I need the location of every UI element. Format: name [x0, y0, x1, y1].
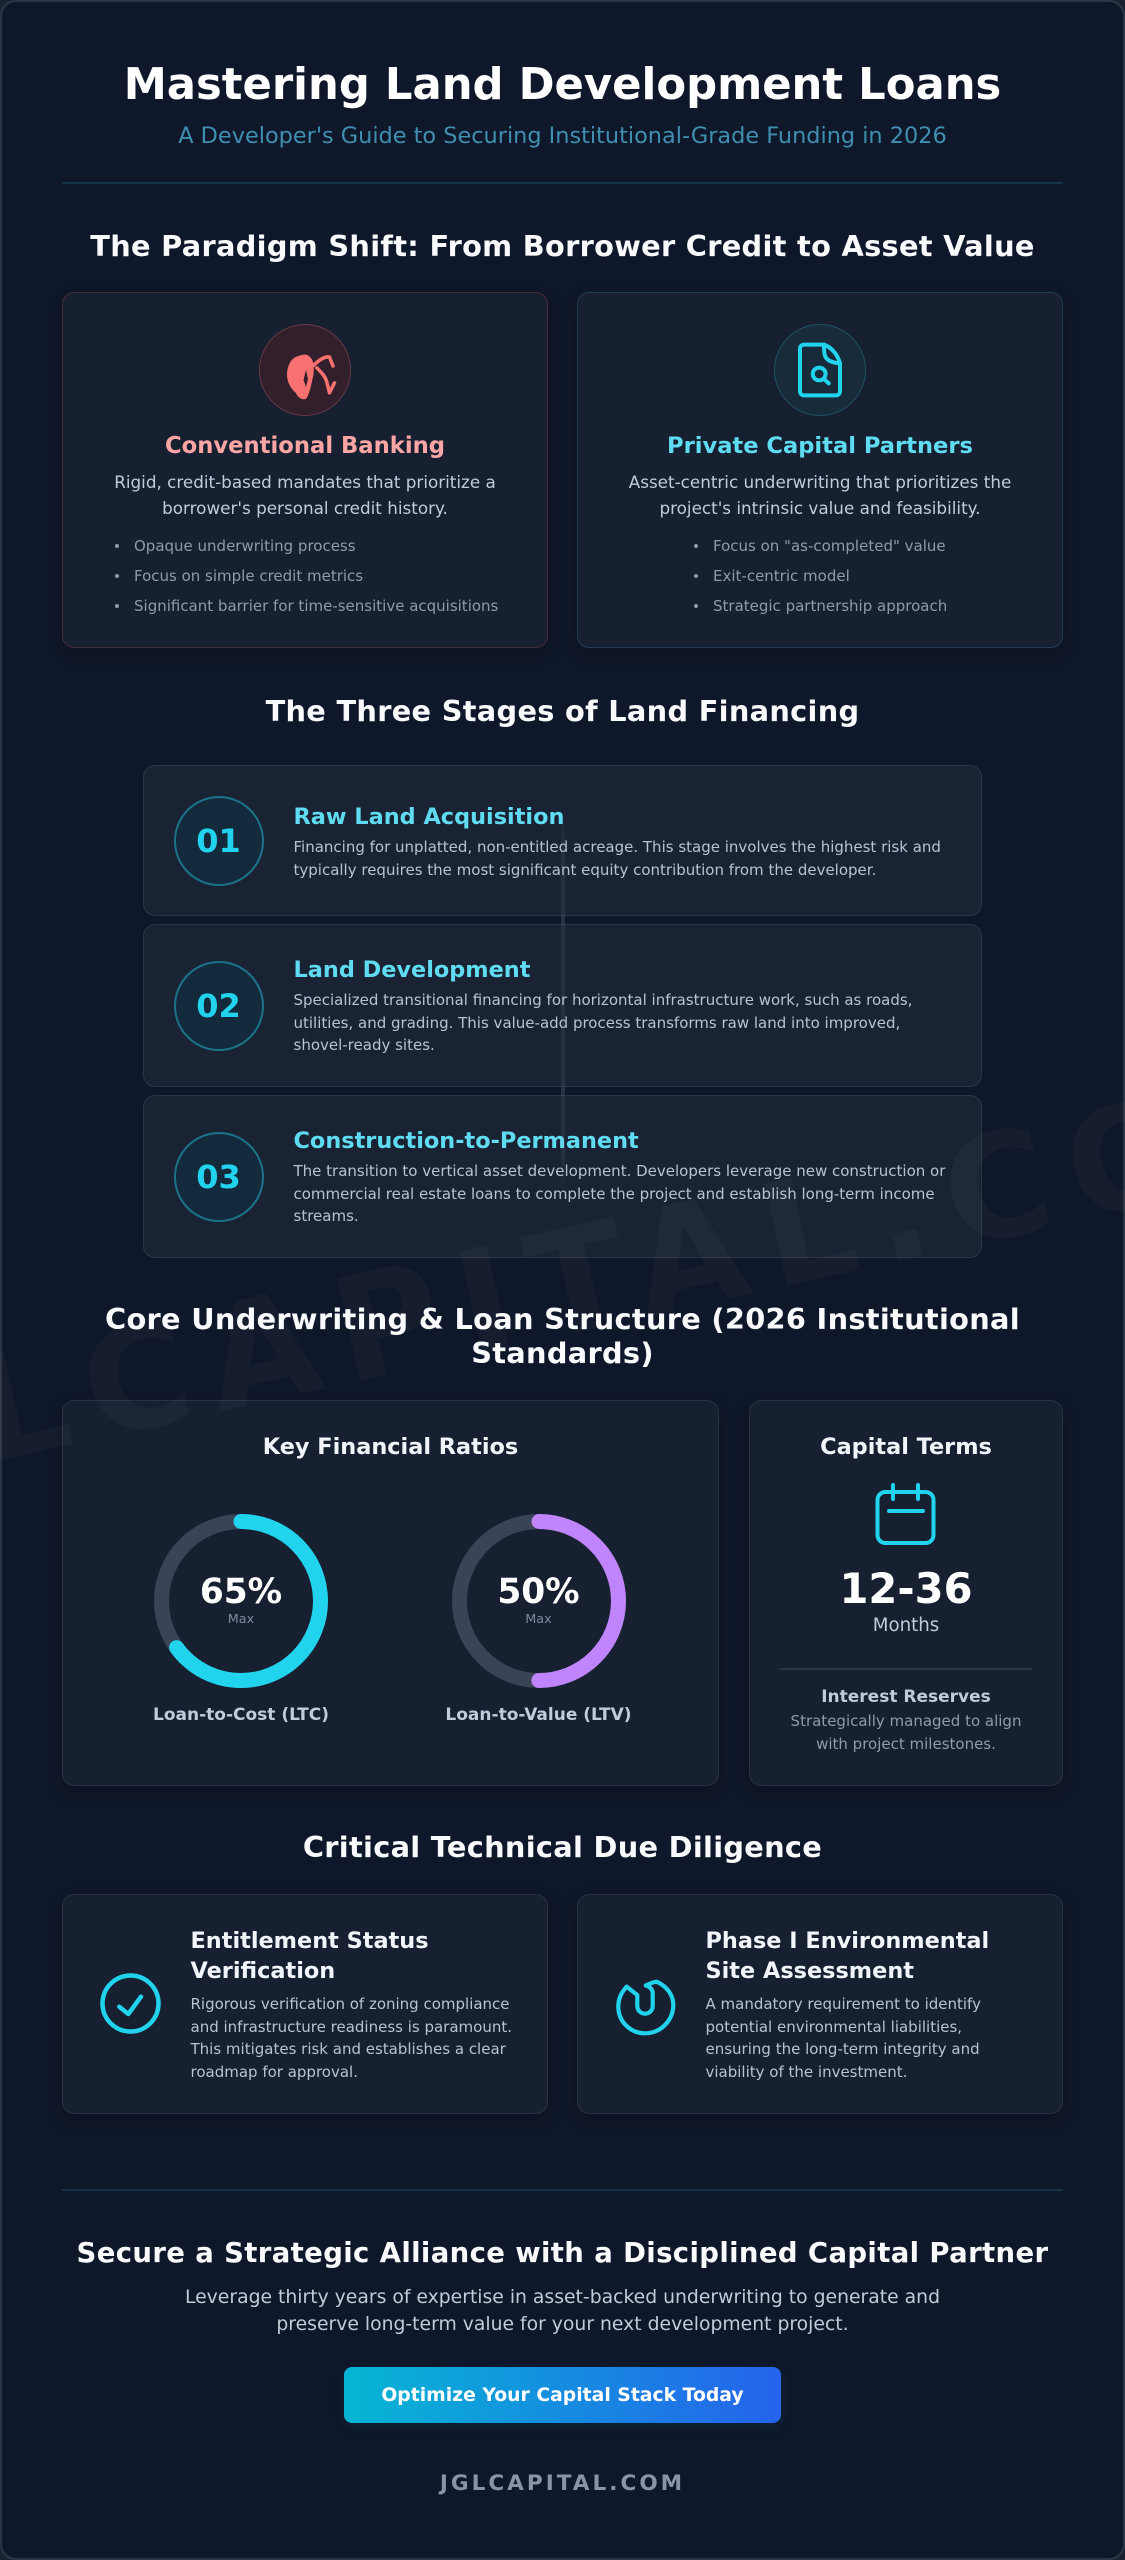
bullet list: Significant barrier for time-sensitive acquisitions	[134, 597, 498, 615]
stage title: Construction-to-Permanent	[294, 1128, 639, 1154]
CTA button	[344, 2367, 781, 2423]
ratio label LTC: Loan-to-Cost (LTC)	[153, 1705, 329, 1725]
card description	[114, 472, 496, 518]
term unit: Months	[873, 1615, 939, 1636]
stage text: utilities, and grading. This value-add process transforms raw land into improved,	[294, 1014, 900, 1032]
number badge	[174, 1132, 264, 1222]
stage text: The transition to vertical asset development. Developers leverage new construction or	[294, 1162, 945, 1180]
CTA text	[185, 2287, 940, 2334]
stage text: Specialized transitional financing for horizontal infrastructure work, such as roads,	[294, 991, 912, 1009]
stage text: typically requires the most significant equity contribution from the developer.	[294, 860, 876, 878]
footer website: JGLCAPITAL.COM	[440, 2471, 685, 2496]
interest reserves text	[791, 1712, 1021, 1752]
item text	[706, 1995, 981, 2081]
icon: environmental ring	[616, 1980, 676, 2036]
card title: Conventional Banking	[165, 433, 445, 459]
icon: broken asset	[259, 324, 351, 416]
title: Mastering Land Development Loans	[124, 60, 1001, 110]
card description: Asset-centric underwriting that prioritizes the	[629, 472, 1011, 492]
stage text: shovel-ready sites.	[294, 1036, 435, 1054]
icon: document search	[774, 324, 866, 416]
heading: core underwriting	[105, 1302, 1020, 1370]
bullet list: Exit-centric model	[713, 567, 850, 585]
item title	[706, 1928, 989, 1984]
stage text: streams.	[294, 1207, 359, 1225]
item text: potential environmental liabilities,	[706, 2018, 962, 2036]
icon: calendar	[876, 1483, 936, 1545]
item text: and infrastructure readiness is paramount.	[190, 2018, 512, 2036]
card title: Private Capital Partners	[667, 433, 973, 459]
card description	[628, 472, 1011, 518]
icon: check circle	[100, 1973, 161, 2034]
stage title: Raw Land Acquisition	[294, 804, 564, 830]
item text: roadmap for approval.	[190, 2063, 358, 2081]
panel: capital terms	[749, 1400, 1063, 1786]
card description: borrower's personal credit history.	[162, 498, 448, 518]
CTA button: Optimize Your Capital Stack Today	[381, 2385, 744, 2406]
bullet list: Focus on "as-completed" value	[713, 537, 946, 555]
donut chart: LTC 65%	[154, 1514, 328, 1688]
item title: Entitlement Status	[190, 1928, 429, 1954]
panel: stage 2	[143, 924, 982, 1087]
heading: three stages: The Three Stages of Land Financing	[266, 694, 859, 728]
subtitle: A Developer's Guide to Securing Institutional-Grade Funding in 2026	[178, 123, 947, 149]
panel: stage 1	[143, 765, 982, 916]
panel: entitlement verification	[62, 1894, 548, 2114]
stage text: Financing for unplatted, non-entitled acreage. This stage involves the highest risk and	[294, 838, 941, 856]
panel: stage 3	[143, 1095, 982, 1258]
heading: due diligence: Critical Technical Due Diligence	[303, 1830, 822, 1864]
item text: This mitigates risk and establishes a clear	[190, 2040, 506, 2058]
interest reserves text: with project milestones.	[816, 1734, 996, 1752]
panel: environmental assessment	[577, 1894, 1063, 2114]
donut chart: LTV 50%	[452, 1514, 626, 1688]
number badge: 02	[196, 987, 241, 1025]
card description: project's intrinsic value and feasibility.	[659, 498, 981, 518]
item text: viability of the investment.	[706, 2063, 907, 2081]
number badge: 03	[196, 1158, 241, 1196]
interest reserves label: Interest Reserves	[821, 1687, 991, 1707]
bullet list: Opaque underwriting process	[134, 537, 356, 555]
ratio label LTV: Loan-to-Value (LTV)	[445, 1705, 632, 1725]
stage text: commercial real estate loans to complete the project and establish long-term income	[294, 1184, 935, 1202]
value: 50%	[497, 1572, 580, 1612]
panel: key financial ratios	[62, 1400, 719, 1786]
caption: Max	[525, 1612, 552, 1627]
number badge	[174, 961, 264, 1051]
card description: Rigid, credit-based mandates that prioritize a	[114, 472, 496, 492]
item text: ensuring the long-term integrity and	[706, 2040, 980, 2058]
item text	[190, 1995, 512, 2081]
item title: Phase I Environmental	[706, 1928, 989, 1954]
caption: Max	[228, 1612, 254, 1627]
stage text	[294, 991, 912, 1054]
interest reserves text: Strategically managed to align	[791, 1712, 1021, 1730]
bullet list	[694, 537, 947, 615]
item title	[190, 1928, 429, 1984]
item text: A mandatory requirement to identify	[706, 1995, 981, 2013]
bullet list: Strategic partnership approach	[713, 597, 947, 615]
panel title: Capital Terms	[820, 1434, 992, 1460]
item text: Rigorous verification of zoning compliance	[190, 1995, 510, 2013]
CTA heading: Secure a Strategic Alliance with a Disciplined Capital Partner	[77, 2237, 1048, 2269]
number badge: 01	[196, 822, 241, 860]
CTA text: Leverage thirty years of expertise in asset-backed underwriting to generate and	[185, 2287, 940, 2308]
panel: conventional banking	[62, 292, 548, 648]
panel: private capital partners	[577, 292, 1063, 648]
number badge	[174, 796, 264, 886]
item title: Verification	[190, 1958, 335, 1984]
stage text	[294, 838, 941, 878]
heading: core underwriting: Core Underwriting & Loan Structure (2026 Institutional	[105, 1302, 1020, 1336]
item title: Site Assessment	[706, 1958, 914, 1984]
value: 65%	[200, 1572, 282, 1612]
CTA text: preserve long-term value for your next development project.	[276, 2314, 849, 2334]
timeline connector line	[561, 815, 565, 1190]
stage title: Land Development	[294, 957, 530, 983]
term value: 12-36	[839, 1564, 973, 1613]
bullet list	[115, 537, 498, 615]
heading: paradigm shift: The Paradigm Shift: From Borrower Credit to Asset Value	[90, 228, 1035, 262]
bullet list: Focus on simple credit metrics	[134, 567, 363, 585]
panel title: Key Financial Ratios	[263, 1434, 518, 1460]
stage text	[293, 1162, 946, 1225]
heading: core underwriting: Standards)	[471, 1336, 654, 1370]
